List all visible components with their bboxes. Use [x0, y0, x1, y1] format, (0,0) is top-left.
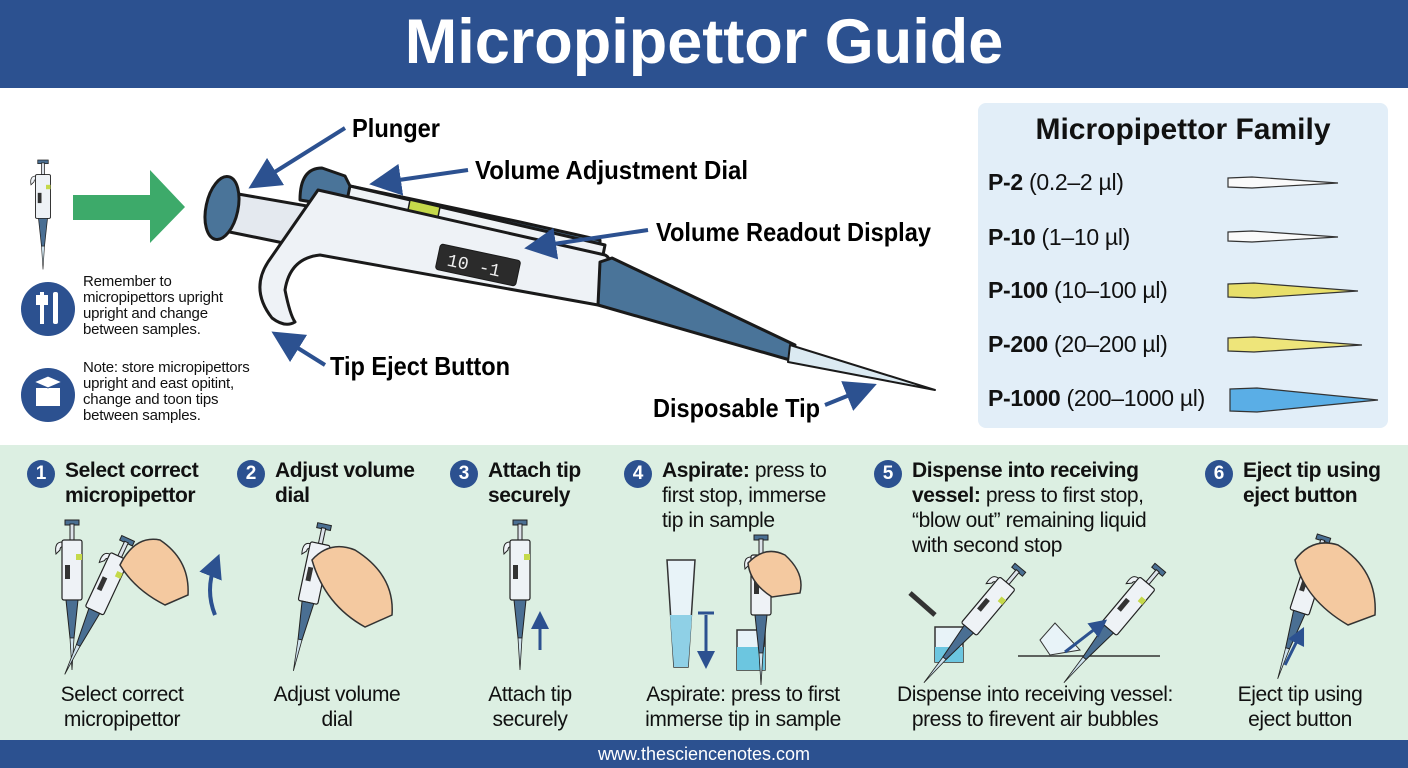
panel: steps: press to firevent air bubbles: [912, 708, 1158, 731]
step 5 heading: 5: [883, 463, 893, 484]
panel: micropipettor family: [978, 103, 1388, 428]
step 4 heading: [624, 459, 826, 532]
step 2 heading: Adjust volume: [275, 459, 414, 482]
step 5 illustration: [910, 557, 1168, 689]
step 1 heading: micropipettor: [65, 484, 195, 507]
step 4 illustration: [667, 535, 801, 685]
step 2 heading: [237, 459, 414, 507]
panel: steps: Aspirate: press to first: [646, 683, 840, 706]
note 2: change and toon tips: [83, 391, 218, 408]
step 1 heading: Select correct: [65, 459, 198, 482]
label texts: Volume Readout Display: [656, 217, 931, 247]
captions: [61, 683, 184, 731]
step 3 illustration: [504, 520, 540, 670]
note 1: micropipettors upright: [83, 289, 223, 306]
step 6 heading: eject button: [1243, 484, 1357, 507]
label texts: Disposable Tip: [653, 393, 820, 423]
panel: micropipettor family: P-1000 (200–1000 µl): [988, 385, 1205, 411]
step 5 heading: “blow out” remaining liquid: [912, 509, 1146, 532]
panel: steps: Adjust volume: [274, 683, 400, 706]
panel: steps: Dispense into receiving vessel:: [897, 683, 1173, 706]
note 1: between samples.: [83, 321, 201, 338]
panel: steps: immerse tip in sample: [645, 708, 841, 731]
step 3 heading: securely: [488, 484, 570, 507]
note 1: [83, 273, 223, 338]
step 2 heading: dial: [275, 484, 310, 507]
step 4 heading: tip in sample: [662, 509, 775, 532]
tip icons: [1227, 176, 1378, 413]
title: [0, 0, 1408, 88]
footer: [0, 740, 1408, 768]
callout arrows: [262, 128, 862, 405]
panel: steps: Eject tip using: [1238, 683, 1362, 706]
main pipette diagram: [21, 113, 936, 423]
panel: steps: eject button: [1248, 708, 1352, 731]
panel: micropipettor family: P-10 (1–10 µl): [988, 224, 1130, 250]
icon: tips circle: [21, 282, 75, 336]
panel: steps: [0, 445, 1408, 740]
step 5 heading: [874, 459, 1146, 557]
step 4 heading: Aspirate: press to: [662, 459, 826, 482]
large pipette: 10 -1: [445, 252, 502, 283]
step 5 heading: vessel: press to first stop,: [912, 484, 1144, 507]
step 1 heading: 1: [36, 463, 46, 484]
note 1: upright and change: [83, 305, 208, 322]
label texts: Volume Adjustment Dial: [475, 155, 748, 185]
footer: www.thesciencenotes.com: [598, 744, 810, 764]
step 5 heading: Dispense into receiving: [912, 459, 1139, 482]
panel: micropipettor family: P-200 (20–200 µl): [988, 331, 1168, 357]
label texts: [330, 113, 931, 423]
step 4 heading: first stop, immerse: [662, 484, 826, 507]
step 6 heading: [1205, 459, 1381, 507]
note 2: between samples.: [83, 407, 201, 424]
panel: steps: Attach tip: [488, 683, 572, 706]
step 4 heading: 4: [633, 463, 643, 484]
step 2 heading: 2: [246, 463, 256, 484]
step 2 illustration: [210, 521, 392, 673]
large pipette: [200, 168, 935, 390]
captions: micropipettor: [64, 708, 180, 731]
step 6 heading: 6: [1214, 463, 1224, 484]
note 2: Note: store micropipettors: [83, 359, 250, 376]
icon: small pipette: [31, 160, 50, 270]
note 1: Remember to: [83, 273, 172, 290]
step 1 heading: [27, 459, 198, 507]
note 2: [83, 359, 250, 424]
step 6 heading: Eject tip using: [1243, 459, 1381, 482]
title: Micropipettor Guide: [405, 7, 1003, 77]
icon: box circle: [21, 368, 75, 422]
step 5 heading: with second stop: [912, 534, 1062, 557]
step 3 heading: Attach tip: [488, 459, 581, 482]
panel: steps: securely: [492, 708, 568, 731]
panel: steps: dial: [321, 708, 353, 731]
panel: micropipettor family: P-100 (10–100 µl): [988, 277, 1168, 303]
note 2: upright and east opitint,: [83, 375, 234, 392]
step 1 illustration: [50, 520, 188, 679]
step 3 heading: [450, 459, 581, 507]
step 3 heading: 3: [459, 463, 469, 484]
step 6 illustration: [1262, 531, 1375, 682]
label texts: Plunger: [352, 113, 440, 143]
captions: Select correct: [61, 683, 183, 706]
label texts: Tip Eject Button: [330, 351, 510, 381]
arrow: green: [73, 170, 185, 243]
panel: micropipettor family: Micropipettor Family: [1035, 113, 1331, 146]
panel: micropipettor family: P-2 (0.2–2 µl): [988, 169, 1124, 195]
